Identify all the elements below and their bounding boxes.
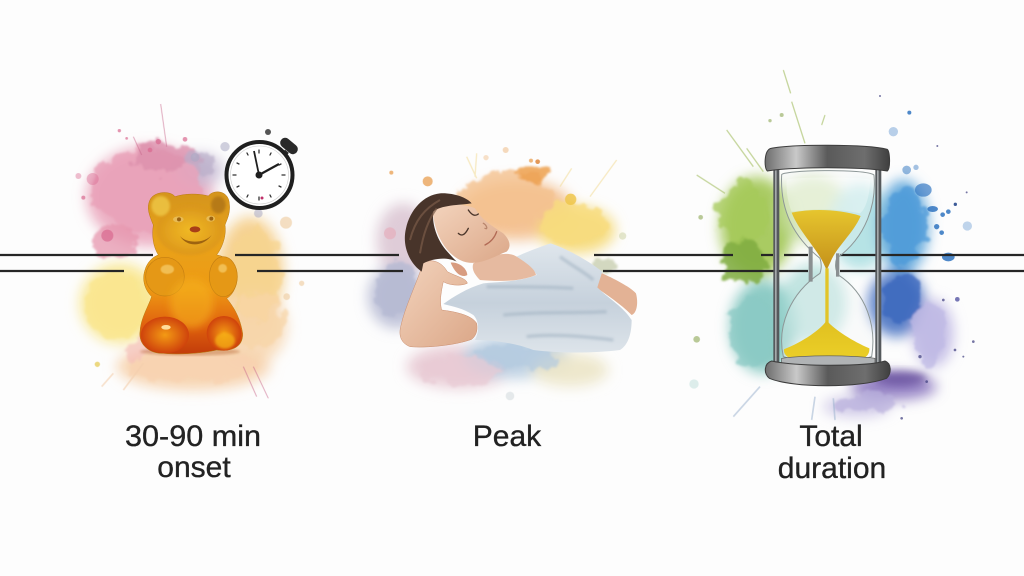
bear feet [141, 316, 241, 353]
bear belly [170, 278, 213, 328]
top cap [765, 145, 890, 171]
ear [451, 263, 467, 276]
bear arms [146, 257, 237, 297]
bear face [151, 196, 226, 255]
label: onset: 30-90 min [125, 420, 261, 453]
shirt [443, 243, 632, 352]
label: peak: Peak [473, 420, 542, 453]
timeline lines [0, 255, 1024, 271]
sand bottom [784, 321, 869, 363]
sleeping person [400, 193, 637, 352]
bear body [140, 192, 243, 354]
watercolor splash: person [368, 147, 626, 400]
sand top [792, 210, 861, 270]
watercolor splash: bear [75, 104, 304, 398]
gummy bear [140, 192, 243, 356]
label: onset second line: onset [157, 451, 231, 484]
stopwatch crown [265, 129, 300, 159]
posts [773, 168, 881, 365]
watercolor splash: hourglass [689, 70, 975, 420]
label: duration: duration [778, 452, 886, 485]
near arm [400, 261, 477, 347]
face [433, 205, 510, 263]
glass [782, 171, 874, 363]
neck and chest [473, 254, 536, 281]
hair [405, 193, 472, 272]
far arm [595, 273, 637, 315]
hourglass [765, 145, 890, 386]
label: total: Total [799, 420, 863, 453]
bottom base [765, 356, 890, 386]
closed eyes and mouth [458, 210, 497, 245]
icon: stopwatch [226, 129, 300, 208]
